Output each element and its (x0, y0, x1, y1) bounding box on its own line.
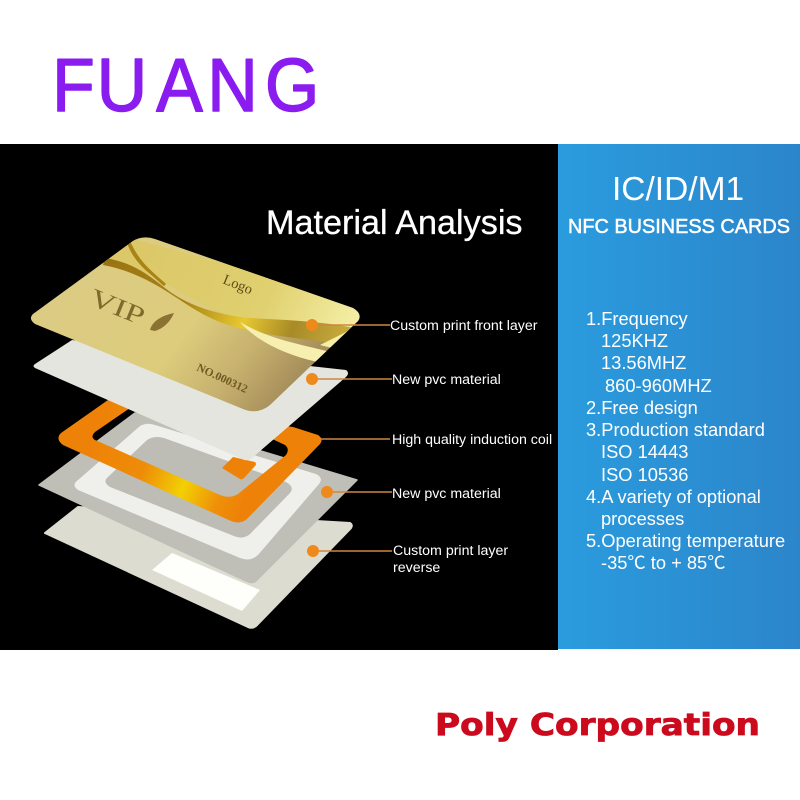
card text: VIP: VIP (86, 283, 149, 331)
panel: product specifications (558, 144, 800, 649)
logo: FUANG: FUANG (52, 44, 319, 128)
card text: Logo: Logo (221, 272, 255, 298)
layer: white pvc material (34, 340, 348, 460)
layer: induction coil (58, 400, 322, 522)
layer: gold front card (31, 235, 370, 411)
layer: grey pvc material (39, 413, 357, 582)
specification list: ISO 10536 (601, 464, 688, 485)
specification list: 3.Production standard (586, 419, 765, 440)
specification list: ISO 14443 (601, 441, 688, 462)
specification list: 125KHZ (601, 330, 668, 351)
card text: card number: NO.000312 (195, 362, 250, 396)
gold swoosh (103, 235, 370, 362)
specification list: 860-960MHZ (605, 375, 712, 396)
brand: Poly Corporation: Poly Corporation (435, 708, 760, 743)
specification list: -35℃ to + 85℃ (601, 552, 725, 573)
callout: custom print layer reverse: Custom print layer (393, 543, 508, 559)
callout: custom print front layer (306, 318, 538, 334)
specification list: processes (601, 508, 684, 529)
icon: butterfly (150, 313, 174, 331)
layer: custom print reverse (45, 507, 352, 628)
callout: custom print front layer: Custom print front layer (390, 318, 538, 334)
panel: material analysis (0, 144, 558, 650)
callout: custom print layer reverse (307, 543, 508, 576)
specification list (586, 308, 785, 573)
callout: new pvc material lower: New pvc material (392, 486, 501, 502)
specification list: 2.Free design (586, 397, 698, 418)
specification list: 5.Operating temperature (586, 530, 785, 551)
specification list: 4.A variety of optional (586, 486, 761, 507)
heading: IC/ID/M1: IC/ID/M1 (612, 171, 744, 208)
callout: new pvc material lower (321, 486, 501, 502)
callout: new pvc material (306, 372, 501, 388)
callout: custom print layer reverse: reverse (393, 560, 440, 576)
specification list: 1.Frequency (586, 308, 688, 329)
callout: high quality induction coil: High quality induction coil (392, 432, 552, 448)
heading: material analysis: Material Analysis (266, 204, 523, 242)
callout: new pvc material: New pvc material (392, 372, 501, 388)
specification list: 13.56MHZ (601, 352, 686, 373)
heading: NFC business cards: NFC BUSINESS CARDS (568, 216, 790, 238)
